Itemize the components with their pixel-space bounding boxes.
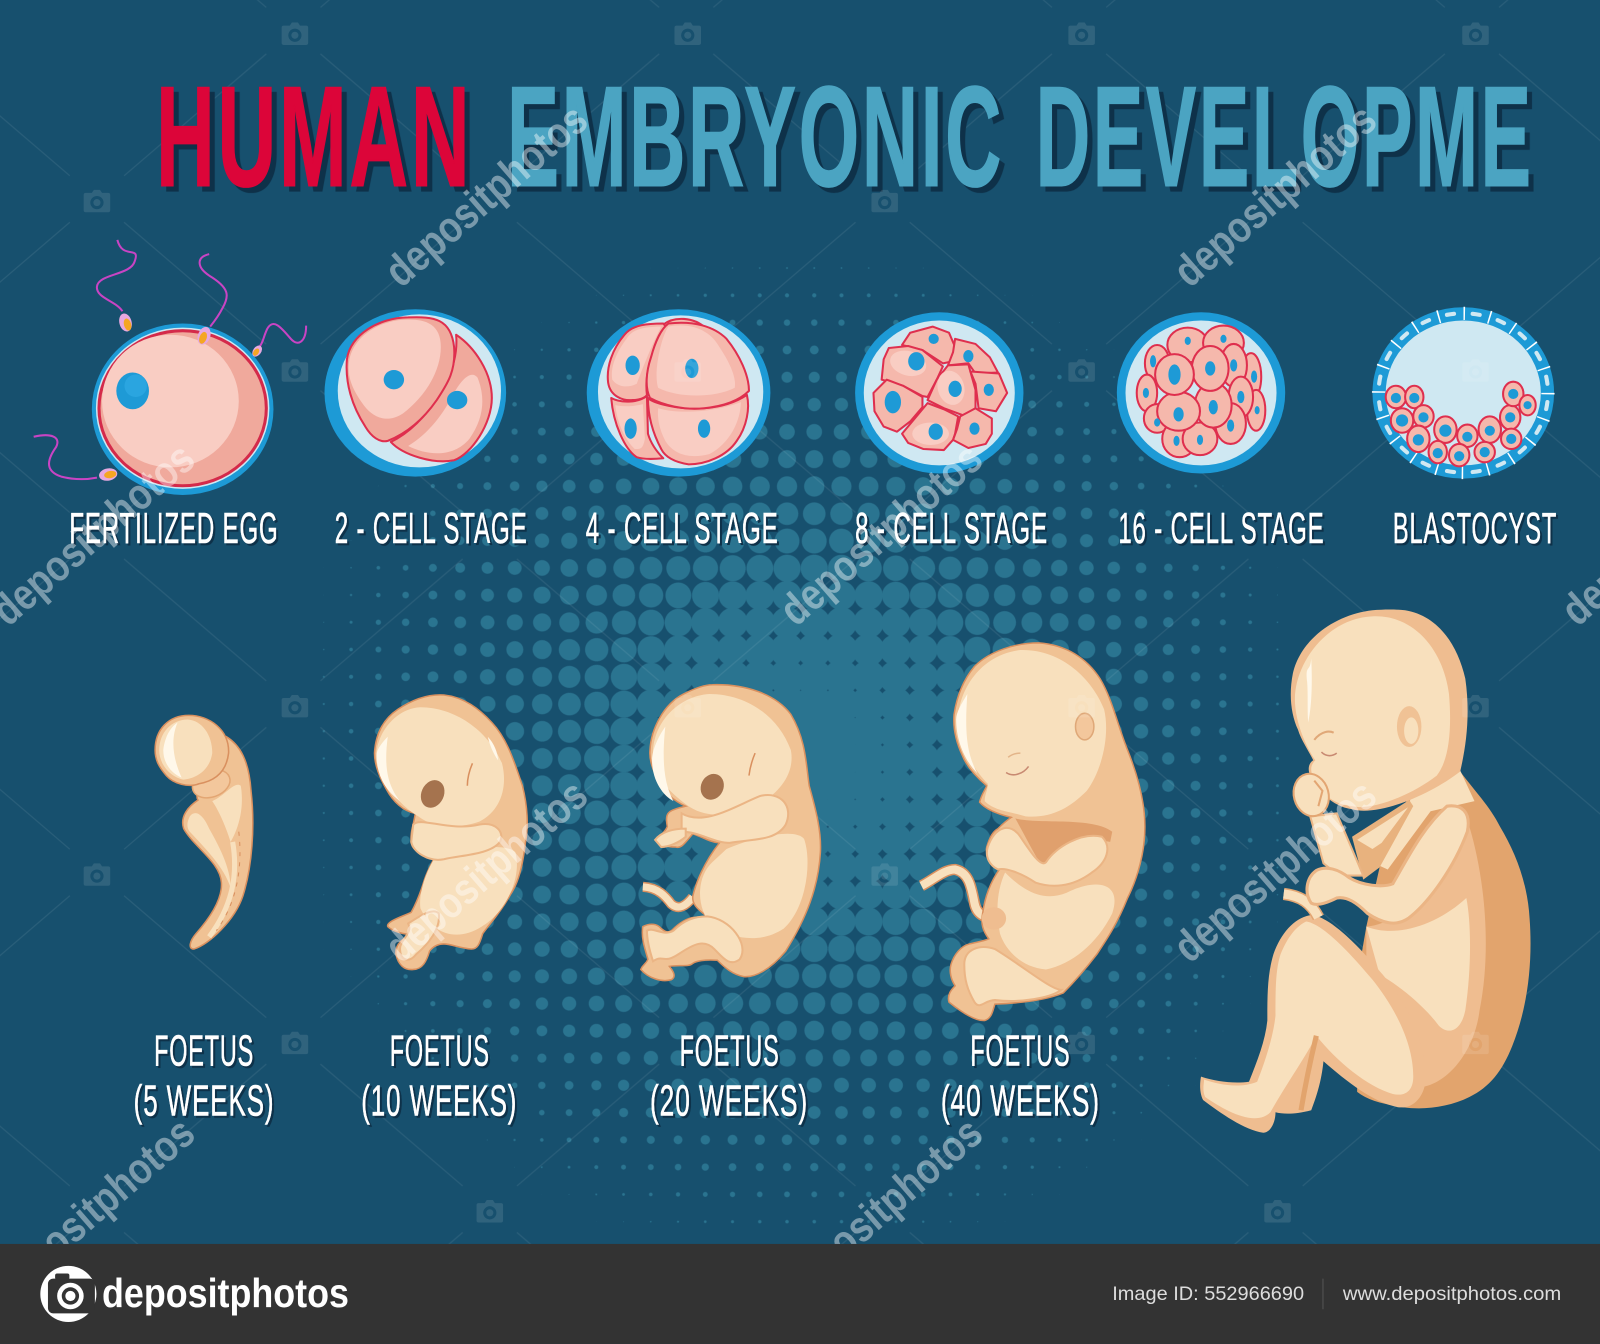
foetus labels: (40 WEEKS)	[941, 1076, 1100, 1125]
icon: sperm cells	[34, 240, 306, 482]
title: EMBRYONIC	[507, 58, 1004, 217]
watermark: depositphotos text: depositphotos	[375, 95, 597, 296]
watermark: depositphotos text: depositphotos	[770, 1108, 992, 1310]
panel: 8-cell stage	[855, 312, 1023, 474]
site url: www.depositphotos.com	[1342, 1283, 1561, 1305]
stage labels: 16 - CELL STAGE	[1118, 504, 1324, 553]
watermark: camera icons	[84, 23, 1489, 1223]
foetus labels: (20 WEEKS)	[650, 1076, 808, 1125]
halftone dot background	[300, 250, 1300, 1250]
panel: 16-cell stage	[1117, 312, 1285, 474]
foetus labels: (10 WEEKS)	[361, 1076, 517, 1125]
umbilical cord	[1284, 894, 1318, 917]
stage labels: 4 - CELL STAGE	[586, 504, 779, 553]
watermark: depositphotos text: depositphotos	[770, 433, 992, 635]
stage labels: 2 - CELL STAGE	[335, 504, 528, 553]
watermark: depositphotos text: depositphotos	[1164, 95, 1386, 296]
icon: logo camera	[40, 1266, 96, 1322]
title	[156, 58, 1534, 217]
thigh and foot	[1200, 915, 1426, 1133]
foetus labels: FOETUS	[680, 1026, 780, 1075]
foetus labels	[134, 1026, 1100, 1125]
panel: 4-cell stage	[587, 309, 770, 477]
image id: Image ID: 552966690	[1112, 1283, 1304, 1305]
watermark: depositphotos text: depositphotos	[1164, 770, 1386, 972]
stage labels: FERTILIZED EGG	[69, 504, 279, 553]
foetus: 10 weeks	[374, 695, 527, 970]
front arm	[1307, 806, 1468, 923]
foetus labels: FOETUS	[390, 1026, 490, 1075]
head	[1291, 610, 1468, 811]
raised hand	[1289, 770, 1334, 820]
foetus labels: FOETUS	[970, 1026, 1070, 1075]
footer bar	[0, 1244, 1600, 1344]
foetus: 5 weeks	[155, 715, 253, 949]
panel: fertilized egg	[34, 240, 306, 495]
foetus: 20 weeks	[641, 685, 821, 981]
foetus labels: (5 WEEKS)	[134, 1076, 274, 1125]
foetus: 40 weeks	[921, 643, 1145, 1021]
title: HUMAN	[156, 58, 472, 217]
watermark: depositphotos text: depositphotos	[375, 770, 597, 972]
raised forearm	[1310, 813, 1363, 876]
panel: blastocyst	[1372, 307, 1554, 479]
neck and raised upper arm	[1377, 770, 1474, 869]
stage labels: 8 - CELL STAGE	[855, 504, 1048, 553]
logo wordmark: depositphotos	[102, 1270, 349, 1316]
foetus: full term baby	[1200, 610, 1531, 1133]
panel: 2-cell stage	[324, 309, 506, 477]
stage labels	[69, 504, 1557, 553]
foetus labels: FOETUS	[154, 1026, 254, 1075]
torso	[1357, 771, 1531, 1108]
